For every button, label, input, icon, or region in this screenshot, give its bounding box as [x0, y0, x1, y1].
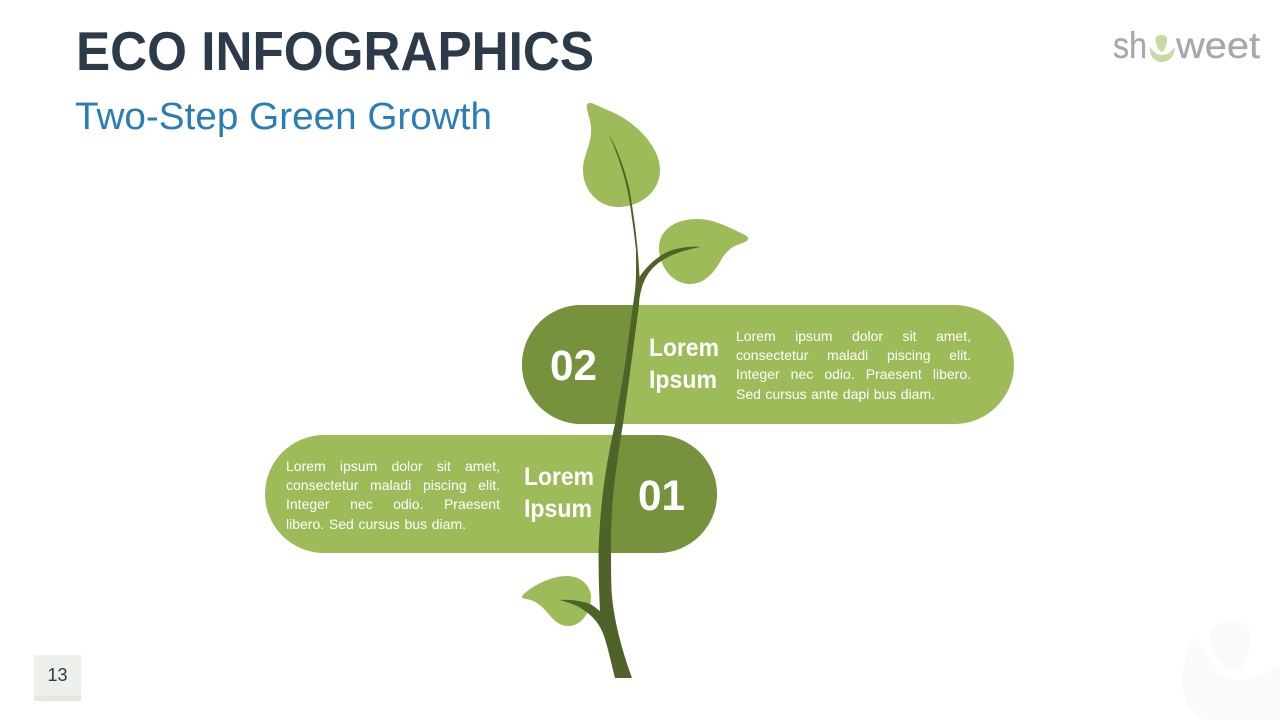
body text: libero. Sed cursus bus diam. [286, 516, 466, 532]
subtitle: Two-Step Green Growth [75, 96, 492, 138]
body text: Lorem ipsum dolor sit amet, [286, 458, 500, 474]
title: ECO INFOGRAPHICS [76, 20, 594, 82]
body text [736, 328, 971, 402]
heading: lorem ipsum: Ipsum [524, 495, 592, 523]
leaf: upper right [659, 219, 748, 284]
number 01: 01 [638, 472, 685, 520]
body text: consectetur maladi piscing elit. [736, 347, 971, 363]
logo: showeet: sh [1113, 25, 1147, 66]
leaf: top [583, 103, 660, 207]
box bottom strip [34, 696, 81, 701]
dark number section [598, 435, 717, 553]
watermark: logo shape [1160, 600, 1280, 720]
heading: lorem ipsum [649, 334, 719, 394]
heading: lorem ipsum [524, 463, 594, 523]
panel: step 02 [522, 305, 1014, 424]
body text: Lorem ipsum dolor sit amet, [736, 328, 971, 344]
body text: Integer nec odio. Praesent [286, 496, 500, 512]
leaf: lower left [522, 576, 591, 626]
logo: showeet [1113, 25, 1261, 66]
body text [286, 458, 500, 532]
panel: step 01 [265, 435, 717, 553]
stem with branches [559, 135, 701, 678]
heading: lorem ipsum: Lorem [649, 334, 719, 362]
heading: lorem ipsum: Lorem [524, 463, 594, 491]
heading: lorem ipsum: Ipsum [649, 366, 717, 394]
body text: Sed cursus ante dapi bus diam. [736, 386, 935, 402]
dark number section [522, 305, 633, 424]
icon: logo leaf figure [1150, 35, 1175, 62]
number 02: 02 [550, 342, 597, 390]
page number: 13 [47, 665, 68, 685]
body text: consectetur maladi piscing elit. [286, 477, 500, 493]
logo: showeet: weet [1175, 25, 1261, 66]
page number box [34, 655, 81, 701]
body text: Integer nec odio. Praesent libero. [736, 366, 971, 382]
